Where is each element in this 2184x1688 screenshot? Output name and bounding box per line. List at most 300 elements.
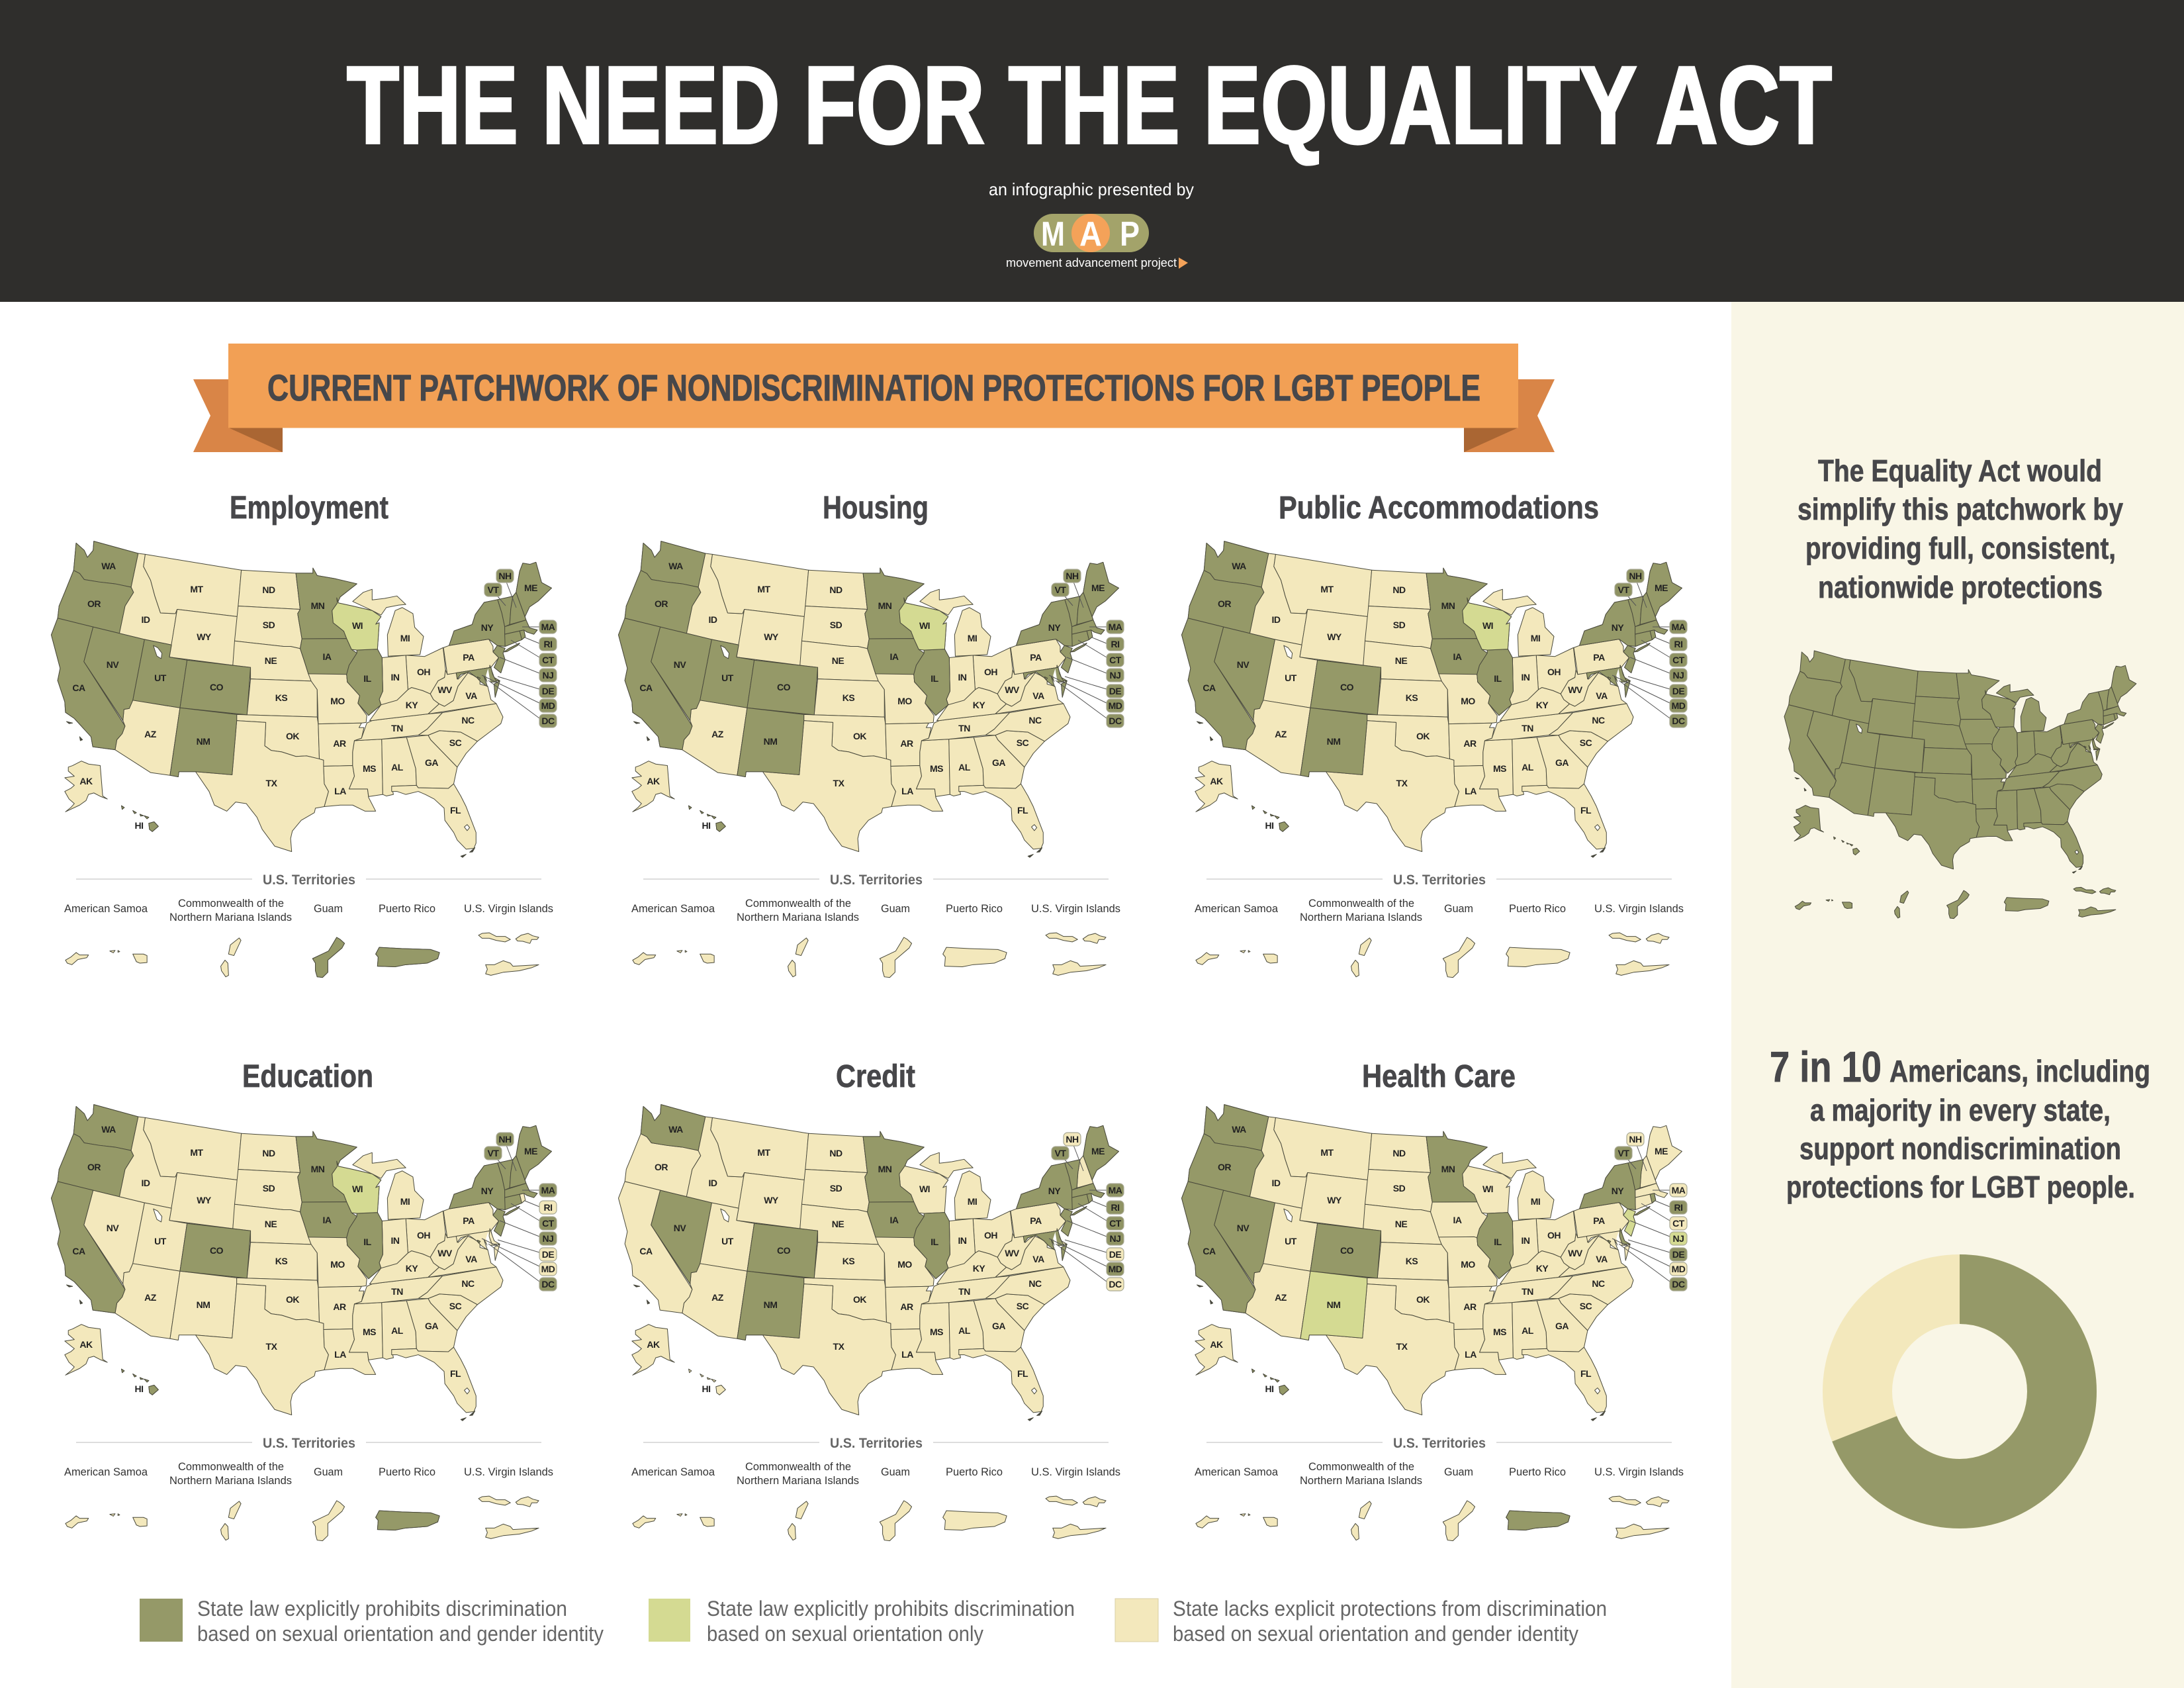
U.S. territories: Guam [881,902,910,915]
U.S. territories: Commonwealth of the [745,897,851,910]
state labels: OH [984,667,997,677]
state labels: MO [330,1259,345,1270]
state labels: IA [1453,1215,1462,1225]
northeast state badges: DC [541,1279,555,1289]
state labels: NV [1237,659,1250,670]
U.S. territories: American Samoa [64,902,148,915]
state labels: NC [461,715,475,726]
U.S. territories: American Samoa [1195,1466,1279,1478]
panel: Credit [618,1059,1124,1541]
heading: Public Accommodations: Public Accommodations [1279,491,1599,526]
state labels: AL [391,762,404,773]
state labels: AZ [711,1292,724,1303]
state labels [639,1124,1105,1394]
state labels: TX [1396,1341,1408,1352]
state labels: IL [931,1237,939,1247]
state labels: ME [1091,1146,1105,1156]
state labels: WV [437,684,453,695]
state labels: HI [702,820,711,831]
state labels: WI [352,620,363,631]
northeast state badges: DC [1109,716,1122,726]
state labels: SC [1017,737,1029,748]
state labels: CO [777,682,791,692]
state labels: OK [286,731,299,741]
state labels: ND [262,585,275,595]
state labels: LA [1465,786,1477,796]
state labels: NC [1028,1278,1042,1289]
state labels [72,561,537,831]
panel: Employment [51,491,557,978]
state labels: ND [262,1148,275,1158]
northeast state badges: NJ [1673,670,1684,680]
state labels: NM [764,736,777,747]
state labels: PA [1593,652,1605,663]
state labels: AK [79,776,93,786]
state labels: UT [721,1236,734,1246]
northeast state badges: NH [498,571,512,581]
state labels: AK [647,1339,660,1350]
state labels [72,1124,537,1394]
state labels: MS [1493,763,1506,774]
state labels: SC [1017,1301,1029,1311]
state labels: WA [668,561,683,571]
state labels: AK [1210,1339,1223,1350]
U.S. territories: Northern Mariana Islands [169,911,292,923]
state labels: AZ [144,729,157,739]
state labels: HI [135,820,143,831]
northeast state badges: MA [541,1185,555,1196]
northeast state badges: MA [541,622,555,632]
state labels: KS [275,1256,287,1266]
heading: Housing: Housing [823,491,929,526]
map: Credit states [618,1105,1118,1421]
state labels: NE [265,655,277,666]
panel: Health Care [1181,1059,1687,1541]
panel: Education [51,1059,557,1541]
northeast state badges: CT [1109,655,1122,665]
state labels: NM [197,736,210,747]
legend: State law explicitly prohibits discrimination [197,1597,567,1620]
northeast state badges: VT [488,1148,499,1158]
state labels: MT [757,584,771,594]
side text: Equality Act statement: nationwide protections [1818,570,2103,604]
state labels: MI [968,633,977,643]
state labels: AK [647,776,660,786]
side map: full nationwide protection [1784,651,2136,919]
northeast state badges: VT [1618,1148,1629,1158]
state labels: NY [481,1186,494,1196]
state labels: VA [1596,690,1608,701]
state labels: MS [363,763,376,774]
banner heading: CURRENT PATCHWORK OF NONDISCRIMINATION PROTECTIONS FOR LGBT PEOPLE [267,367,1480,408]
U.S. territories: U.S. Virgin Islands [1594,902,1684,915]
logo: MAP: A [1079,215,1102,254]
northeast state badges: DE [1672,1249,1684,1260]
state labels: AZ [1275,1292,1287,1303]
state labels: MT [757,1147,771,1158]
state labels: VA [465,1254,477,1264]
state labels: WV [1568,684,1583,695]
state labels: NY [1612,1186,1624,1196]
state labels: MI [1531,633,1540,643]
state labels: AL [958,762,971,773]
state labels: FL [1017,1368,1028,1379]
state labels: AK [79,1339,93,1350]
state labels: MT [1320,1147,1334,1158]
U.S. territories: Commonwealth of the [1308,897,1414,910]
state labels: IL [1494,1237,1502,1247]
state labels: VA [1596,1254,1608,1264]
state labels: MS [1493,1327,1506,1337]
state labels: FL [1580,1368,1592,1379]
northeast state badges: VT [1618,585,1629,595]
state labels: VA [1032,690,1044,701]
state labels: TX [833,1341,845,1352]
logo: MAP: P [1120,215,1140,254]
U.S. territories: U.S. Territories [830,1436,923,1451]
northeast state badges: NJ [1110,670,1120,680]
northeast state badges: MD [541,700,555,711]
state labels: NE [265,1219,277,1229]
state labels: MT [1320,584,1334,594]
state labels: WV [1005,1248,1020,1258]
U.S. territories: Commonwealth of the [745,1460,851,1473]
state labels: IN [1521,1235,1530,1246]
state labels: MI [968,1196,977,1207]
side text: Equality Act statement: providing full, consistent, [1805,531,2116,565]
state labels: OR [1218,1162,1231,1172]
northeast state badges [1049,569,1124,727]
U.S. territories: Northern Mariana Islands [737,1474,859,1487]
U.S. territories: Guam [314,902,343,915]
northeast state badges: DC [1672,1279,1685,1289]
state labels: KY [406,1263,418,1274]
side text: Equality Act statement: simplify this patchwork by [1797,492,2123,526]
state labels: MO [897,1259,912,1270]
state labels: SD [263,1183,275,1194]
state labels: OK [853,1294,866,1305]
U.S. territories: U.S. Territories [830,872,923,888]
state labels: ME [1655,583,1668,593]
U.S. territories: Guam [881,1466,910,1478]
state labels: WI [352,1184,363,1194]
state labels: NM [1327,1299,1340,1310]
donut chart: 70 percent [1857,1289,2062,1493]
state labels: WY [197,632,212,642]
state labels: AR [1463,738,1477,749]
map: Employment states [51,541,551,857]
state labels: KS [1406,692,1418,703]
state labels: OR [655,1162,668,1172]
state labels: PA [1030,1215,1042,1226]
legend: State lacks explicit protections from discrimination [1173,1597,1607,1620]
legend: State law explicitly prohibits discrimination [707,1597,1075,1620]
state labels: MS [363,1327,376,1337]
U.S. territories: Puerto Rico [379,902,435,915]
northeast state badges: MA [1672,1185,1686,1196]
state labels: OK [286,1294,299,1305]
U.S. territories [1195,1436,1684,1541]
northeast state badges [1049,1133,1124,1291]
U.S. territories: U.S. Virgin Islands [1031,902,1120,915]
state labels: UT [1285,673,1297,683]
state labels: SD [1393,1183,1406,1194]
northeast state badges: MD [1672,1264,1686,1274]
northeast state badges: CT [542,655,555,665]
U.S. territories: Puerto Rico [946,1466,1003,1478]
state labels: NV [674,1223,686,1233]
U.S. territories: Guam [1444,1466,1473,1478]
state labels: IL [931,673,939,684]
state labels: MO [1461,696,1475,706]
logo: MAP [1006,214,1188,269]
state labels: IL [363,673,372,684]
state labels: PA [463,1215,475,1226]
state labels: WI [919,1184,930,1194]
state labels: NV [674,659,686,670]
state labels: HI [1265,1383,1273,1394]
state labels: SD [830,620,842,630]
northeast state badges [1612,1133,1687,1291]
northeast state badges: NH [498,1134,512,1145]
U.S. territories: U.S. Territories [1393,872,1486,888]
northeast state badges: NJ [543,670,553,680]
northeast state badges: MD [1109,700,1122,711]
state labels: WV [437,1248,453,1258]
state labels: IL [363,1237,372,1247]
state labels: NV [107,1223,119,1233]
state labels: LA [334,786,346,796]
northeast state badges: DE [1672,686,1684,696]
state labels: OR [87,1162,101,1172]
state labels: ID [142,1178,150,1188]
header band [0,0,2184,302]
side text: 7 in 10 statistic: support nondiscrimination [1799,1131,2121,1166]
state labels: NE [1395,655,1407,666]
map: Health Care states [1181,1105,1682,1421]
state labels: CA [1203,682,1216,693]
state labels: NM [1327,736,1340,747]
northeast state badges: DC [541,716,555,726]
U.S. territories: Northern Mariana Islands [1300,911,1422,923]
state labels: SC [449,737,462,748]
state labels: CO [210,1245,224,1256]
state labels: AR [333,1301,346,1312]
state labels: AR [900,738,913,749]
state labels: AZ [144,1292,157,1303]
state labels: TN [1522,1286,1533,1297]
state labels: SD [263,620,275,630]
legend: based on sexual orientation and gender identity [197,1622,604,1646]
state labels: PA [1593,1215,1605,1226]
state labels: SD [1393,620,1406,630]
subtitle: an infographic presented by [989,179,1194,199]
state labels: HI [135,1383,143,1394]
state labels: UT [154,673,167,683]
state labels: GA [992,757,1005,768]
state labels: UT [1285,1236,1297,1246]
U.S. territories: Puerto Rico [946,902,1003,915]
northeast state badges [482,569,557,727]
state labels: UT [721,673,734,683]
state labels: KY [1536,700,1549,710]
state labels: CA [72,1246,85,1256]
state labels: TX [833,778,845,788]
heading: Education: Education [242,1059,373,1094]
state labels: NY [1048,622,1061,633]
state labels: WY [1327,632,1342,642]
state labels: ME [1655,1146,1668,1156]
state labels: AL [1522,1325,1534,1336]
state labels: KS [1406,1256,1418,1266]
state labels: FL [450,1368,461,1379]
legend [140,1597,1607,1646]
state labels: ID [708,614,717,625]
state labels: WA [101,1124,116,1135]
northeast state badges: DE [1109,1249,1121,1260]
state labels: TN [391,1286,403,1297]
U.S. territories: U.S. Virgin Islands [464,902,553,915]
state labels: AL [958,1325,971,1336]
state labels: WA [101,561,116,571]
northeast state badges: DC [1109,1279,1122,1289]
northeast state badges: NJ [1110,1233,1120,1244]
state labels: OK [853,731,866,741]
state labels: LA [901,786,913,796]
northeast state badges: DE [542,686,554,696]
state labels: KY [973,1263,985,1274]
state labels: SC [1580,737,1592,748]
northeast state badges: VT [1055,585,1066,595]
state labels: NE [832,655,844,666]
U.S. territories: Puerto Rico [1509,902,1566,915]
U.S. territories: U.S. Territories [263,872,355,888]
state labels: CO [777,1245,791,1256]
northeast state badges: CT [1672,1218,1685,1229]
map: Public Accommodations states [1181,541,1682,857]
state labels: TN [958,1286,970,1297]
state labels: MT [190,1147,204,1158]
state labels: NC [1028,715,1042,726]
state labels: GA [425,757,438,768]
state labels: MS [930,1327,943,1337]
state labels: PA [1030,652,1042,663]
state labels: OH [417,1230,430,1241]
state labels: AL [1522,762,1534,773]
state labels: AL [391,1325,404,1336]
U.S. territories: Commonwealth of the [178,1460,284,1473]
northeast state badges: NH [1629,1134,1642,1145]
northeast state badges: CT [1672,655,1685,665]
state labels: NM [197,1299,210,1310]
state labels: WY [764,1195,779,1205]
map: Housing states [618,541,1118,857]
state labels: OH [417,667,430,677]
northeast state badges: MA [1109,1185,1122,1196]
state labels: NY [481,622,494,633]
northeast state badges [482,1133,557,1291]
state labels: CO [1340,682,1354,692]
state labels: SC [1580,1301,1592,1311]
state labels: TX [266,778,278,788]
northeast state badges: DE [542,1249,554,1260]
U.S. territories: U.S. Virgin Islands [464,1466,553,1478]
state labels: OK [1416,731,1430,741]
state labels: OH [1547,667,1561,677]
state labels: MS [930,763,943,774]
state labels [639,561,1105,831]
state labels: GA [1555,757,1569,768]
northeast state badges: RI [1111,639,1120,649]
state labels: OR [1218,598,1231,609]
banner ribbon [193,344,1555,452]
state labels: ID [708,1178,717,1188]
northeast state badges [1612,569,1687,727]
northeast state badges: MD [1109,1264,1122,1274]
U.S. territories: U.S. Territories [1393,1436,1486,1451]
state labels: WY [197,1195,212,1205]
state labels: NC [1592,715,1605,726]
state labels: ME [524,1146,537,1156]
state labels: TX [1396,778,1408,788]
U.S. territories: Northern Mariana Islands [1300,1474,1422,1487]
state labels: AZ [1275,729,1287,739]
state labels: ME [1091,583,1105,593]
state labels: MN [311,1164,325,1174]
U.S. territories: Guam [314,1466,343,1478]
side text: 7 in 10 statistic: 7 in 10 [1770,1043,1882,1091]
northeast state badges: NH [1066,571,1079,581]
state labels: OR [655,598,668,609]
state labels: IA [323,1215,332,1225]
state labels: IN [1521,672,1530,682]
state labels: NE [832,1219,844,1229]
U.S. territories [631,1436,1120,1541]
heading: Employment: Employment [230,491,388,526]
northeast state badges: RI [544,639,552,649]
state labels: NY [1612,622,1624,633]
U.S. territories [631,872,1120,978]
state labels: MN [878,600,892,611]
heading: Health Care: Health Care [1362,1059,1516,1094]
state labels: MN [878,1164,892,1174]
northeast state badges: CT [542,1218,555,1229]
state labels: NC [461,1278,475,1289]
state labels: AZ [711,729,724,739]
state labels: AR [333,738,346,749]
state labels: KS [842,1256,854,1266]
state labels: KY [973,700,985,710]
U.S. territories: Guam [1444,902,1473,915]
state labels: WI [1482,1184,1493,1194]
state labels: TN [1522,723,1533,733]
state labels: WY [764,632,779,642]
state labels: IN [390,672,400,682]
state labels: OK [1416,1294,1430,1305]
side text: 7 in 10 statistic [1770,1043,2150,1204]
U.S. territories: U.S. Virgin Islands [1594,1466,1684,1478]
state labels: MT [190,584,204,594]
state labels: HI [1265,820,1273,831]
state labels: FL [1580,805,1592,816]
state labels: LA [901,1349,913,1360]
state labels: ND [1392,1148,1406,1158]
state labels: WI [1482,620,1493,631]
logo: MAP: movement advancement project [1006,256,1177,269]
state labels: UT [154,1236,167,1246]
state labels: TN [958,723,970,733]
state labels: IL [1494,673,1502,684]
